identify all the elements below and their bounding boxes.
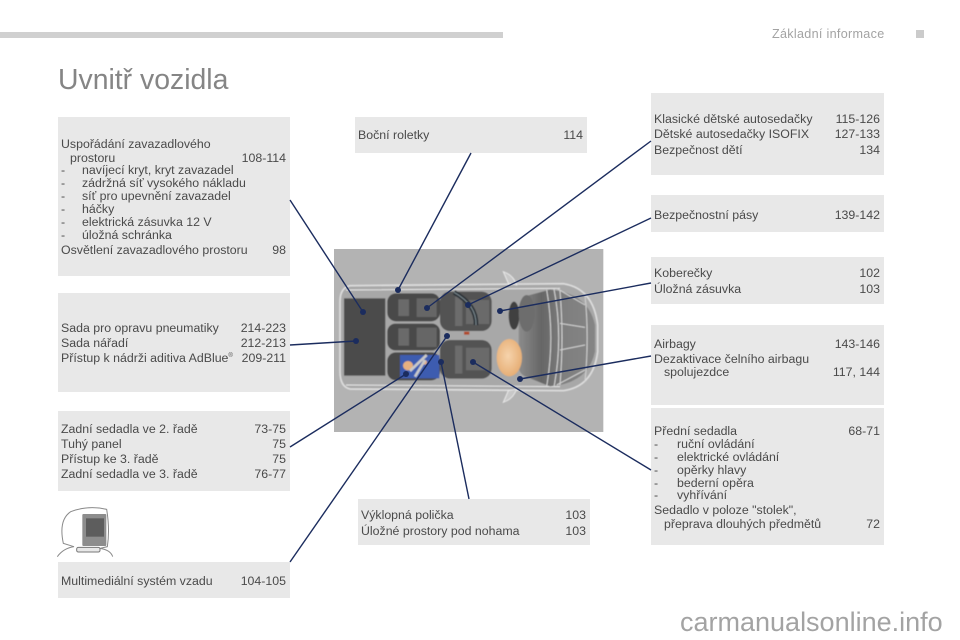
panel: side blinds: 114 [563,128,583,142]
panel: seat belts: 139-142 [835,208,880,222]
panel: cargo area: - [61,215,65,229]
panel: front seats: bederní opěra [677,476,754,490]
panel: front seats: 68-71 [848,424,880,438]
panel: cargo area: 98 [272,243,286,257]
top grey bar [0,32,503,38]
panel: front seats: ruční ovládání [677,437,755,451]
icon: rear headrest screen [57,508,113,557]
panel: front seats: - [654,437,658,451]
panel: front seats: 72 [866,517,880,531]
airbag [497,339,522,376]
panel: cargo area: - [61,202,65,216]
title: Uvnitř vozidla [58,64,228,96]
panel: front seats: Přední sedadla [654,424,737,438]
panel: cargo area: Uspořádání zavazadlového [61,137,211,151]
panel: tyre repair and tools: Sada nářadí [61,336,128,350]
panel: tyre repair and tools: 214-223 [241,321,286,335]
panel: cargo area [58,117,290,276]
panel: multimedia: Multimediální systém vzadu [61,574,213,588]
panel: child seats: 134 [859,143,880,157]
panel: cargo area: úložná schránka [82,228,172,242]
panel: cargo area: síť pro upevnění zavazadel [82,189,231,203]
steering wheel [509,302,519,330]
panel: airbags: spolujezdce [664,365,729,379]
third and second row seats [387,293,440,321]
panel: airbags [651,325,884,405]
panel: tyre repair and tools: Přístup k nádrži aditiva AdBlue® [61,351,233,365]
door mirrors [503,272,517,402]
panel: multimedia: 104-105 [241,574,286,588]
panel: rear seats [58,411,290,491]
panel: front seats: vyhřívání [677,488,727,502]
car cutaway illustration [334,249,603,432]
panel: child seats: Bezpečnost dětí [654,143,743,157]
panel: fold-down tray: 103 [565,524,586,538]
panel: front seats: elektrické ovládání [677,450,779,464]
section label: Základní informace [772,27,884,41]
panel: front seats: - [654,463,658,477]
seat belt [454,292,476,325]
panel: child seats: 115-126 [836,112,880,126]
panel: fold-down tray: 103 [565,508,586,522]
panel: tyre repair and tools [58,293,290,392]
panel: fold-down tray [358,499,590,545]
panel: mats and drawer: Koberečky [654,266,712,280]
panel: rear seats: Tuhý panel [61,437,122,451]
panel: side blinds: Boční roletky [358,128,429,142]
panel: cargo area: - [61,189,65,203]
front seats [440,292,492,331]
windscreen and dashboard [518,290,595,386]
panel: front seats: - [654,450,658,464]
panel: cargo area: háčky [82,202,114,216]
panel: tyre repair and tools: 209-211 [242,351,286,365]
cargo floor [344,298,385,376]
panel: side blinds [355,117,587,153]
panel: rear seats: 73-75 [254,422,286,436]
panel: cargo area: prostoru [70,151,115,165]
panel: mats and drawer: 102 [859,266,880,280]
watermark: carmanualsonline.info [680,607,943,637]
panel: rear seats: Zadní sedadla ve 3. řadě [61,467,198,481]
panel: mats and drawer: 103 [859,282,880,296]
panel: rear seats: Přístup ke 3. řadě [61,452,158,466]
panel: front seats: - [654,476,658,490]
panel: airbags: 117, 144 [833,365,880,379]
panel: airbags: Dezaktivace čelního airbagu [654,352,809,366]
panel: mats and drawer [651,257,884,304]
panel: cargo area: zádržná síť vysokého nákladu [82,176,246,190]
panel: fold-down tray: Výklopná polička [361,508,454,522]
panel: front seats: Sedadlo v poloze "stolek", [654,503,797,517]
panel: cargo area: elektrická zásuvka 12 V [82,215,212,229]
panel: cargo area: Osvětlení zavazadlového prostoru [61,243,248,257]
panel: cargo area: - [61,163,65,177]
panel: rear seats: 75 [272,452,286,466]
panel: seat belts: Bezpečnostní pásy [654,208,758,222]
panel: child seats: Klasické dětské autosedačky [654,112,812,126]
panel: rear seats: 76-77 [254,467,286,481]
panel: tyre repair and tools: 212-213 [241,336,286,350]
panel: cargo area: 108-114 [242,151,286,165]
panel: multimedia [58,562,290,598]
panel: rear seats: 75 [272,437,286,451]
panel: front seats: přeprava dlouhých předmětů [664,517,821,531]
panel: airbags: 143-146 [835,337,880,351]
panel: front seats: opěrky hlavy [677,463,746,477]
panel: cargo area: navíjecí kryt, kryt zavazadel [82,163,234,177]
panel: front seats [651,408,884,545]
panel: child seats: 127-133 [835,127,880,141]
section marker square [916,30,924,38]
child seat [400,355,439,378]
panel: front seats: - [654,488,658,502]
panel: rear seats: Zadní sedadla ve 2. řadě [61,422,198,436]
panel: cargo area: - [61,228,65,242]
panel: airbags: Airbagy [654,337,696,351]
panel: tyre repair and tools: Sada pro opravu pneumatiky [61,321,219,335]
panel: fold-down tray: Úložné prostory pod nohama [361,524,520,538]
vehicle body [340,284,598,391]
leader lines [290,141,651,562]
panel: cargo area: - [61,176,65,190]
panel: child seats: Dětské autosedačky ISOFIX [654,127,809,141]
panel: child seats [651,93,884,175]
panel: mats and drawer: Úložná zásuvka [654,282,741,296]
panel: seat belts [651,195,884,232]
leader dots [353,287,523,382]
